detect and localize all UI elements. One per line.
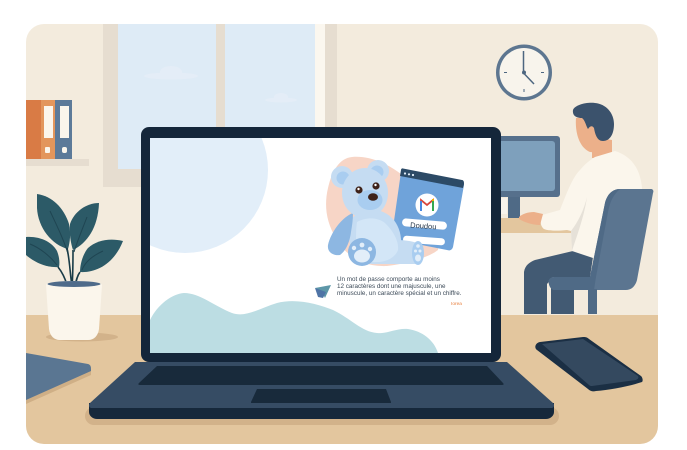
desktop monitor [495, 136, 571, 233]
wall clock [496, 44, 552, 100]
paper plane arrow [315, 285, 331, 298]
desk [26, 315, 658, 445]
left arm [328, 213, 353, 255]
password label: Doudou [410, 221, 437, 231]
screen contents [150, 138, 464, 353]
password advice text [337, 276, 462, 297]
shelf with binders [26, 100, 89, 166]
head [342, 168, 388, 218]
teddy bear [328, 160, 424, 266]
laptop shadow [85, 407, 559, 425]
ears [331, 166, 353, 188]
source credit: Iorea [451, 301, 462, 307]
tablet on desk [26, 353, 91, 404]
teal wave [150, 293, 438, 353]
password advice text: Un mot de passe comporte au moins [337, 276, 440, 283]
left foot [348, 238, 376, 266]
login window [392, 168, 464, 250]
keyboard [138, 366, 504, 385]
person at desk [519, 103, 653, 314]
password advice text: minuscule, un caractère spécial et un chiffre. [337, 290, 462, 297]
peach blob [326, 157, 439, 266]
plant [26, 194, 123, 342]
right leg [378, 240, 416, 264]
body [349, 210, 401, 264]
laptop base [89, 403, 554, 419]
laptop bezel [141, 127, 501, 362]
smartphone [535, 337, 643, 391]
pale blue circle [150, 138, 268, 253]
trackpad [251, 389, 391, 403]
wall [26, 24, 658, 316]
password advice text: 12 caractères dont une majuscule, une [337, 283, 446, 290]
laptop [85, 127, 559, 425]
laptop screen [150, 138, 491, 353]
window [103, 24, 337, 187]
